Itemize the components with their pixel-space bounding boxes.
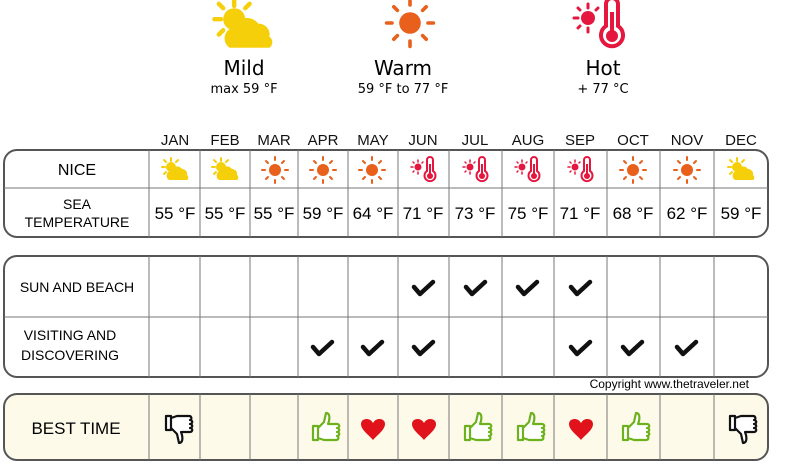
icon: cloud sun large xyxy=(214,0,272,48)
label: sun and beach: SUN AND BEACH xyxy=(20,279,134,295)
legend: warm xyxy=(358,0,448,97)
label: best time: BEST TIME xyxy=(31,419,121,438)
icon: thermometer large xyxy=(574,0,623,46)
sea temperatures: 75 °F xyxy=(508,204,548,223)
sea temperatures: 71 °F xyxy=(560,204,600,223)
icon: sun large xyxy=(387,0,433,46)
legend: mild: Mild xyxy=(223,56,265,80)
legend: mild: max 59 °F xyxy=(210,82,278,97)
table: climate xyxy=(4,150,768,237)
month headers: FEB xyxy=(210,132,240,149)
sea temperatures: 55 °F xyxy=(155,204,195,223)
month headers: APR xyxy=(308,132,339,149)
sea temperatures: 59 °F xyxy=(303,204,343,223)
label: NICE: NICE xyxy=(58,162,96,179)
legend: warm: Warm xyxy=(374,56,432,80)
month headers: MAR xyxy=(257,132,291,149)
month headers: JUL xyxy=(462,132,488,149)
legend: hot xyxy=(574,0,629,97)
legend: mild xyxy=(210,0,278,97)
month headers: AUG xyxy=(512,132,544,149)
sea temperatures xyxy=(155,204,761,223)
month headers xyxy=(161,132,757,149)
month headers: JUN xyxy=(408,132,438,149)
sea temperatures: 68 °F xyxy=(613,204,653,223)
copyright: Copyright www.thetraveler.net xyxy=(590,377,750,391)
month headers: DEC xyxy=(725,132,757,149)
label: visiting and discovering: DISCOVERING xyxy=(21,347,119,363)
checks: sun and beach xyxy=(414,282,590,294)
legend: hot: + 77 °C xyxy=(577,82,629,97)
sea temperatures: 62 °F xyxy=(667,204,707,223)
rating icons xyxy=(166,413,756,443)
month headers: JAN xyxy=(161,132,189,149)
table: best time xyxy=(4,394,768,460)
sea temperatures: 64 °F xyxy=(353,204,393,223)
month headers: MAY xyxy=(357,132,389,149)
checks: visiting xyxy=(313,342,696,354)
legend: hot: Hot xyxy=(585,56,621,80)
month headers: NOV xyxy=(671,132,703,149)
month headers: OCT xyxy=(617,132,649,149)
month headers: SEP xyxy=(565,132,595,149)
legend: warm: 59 °F to 77 °F xyxy=(358,82,448,97)
label: visiting and discovering: VISITING AND xyxy=(24,327,116,343)
sea temperatures: 73 °F xyxy=(455,204,495,223)
label: sea temperature: SEA xyxy=(63,196,92,212)
label: sea temperature: TEMPERATURE xyxy=(25,214,129,230)
sea temperatures: 55 °F xyxy=(254,204,294,223)
sea temperatures: 59 °F xyxy=(721,204,761,223)
weather icons xyxy=(162,157,754,183)
table: activities xyxy=(4,256,768,377)
sea temperatures: 71 °F xyxy=(403,204,443,223)
sea temperatures: 55 °F xyxy=(205,204,245,223)
